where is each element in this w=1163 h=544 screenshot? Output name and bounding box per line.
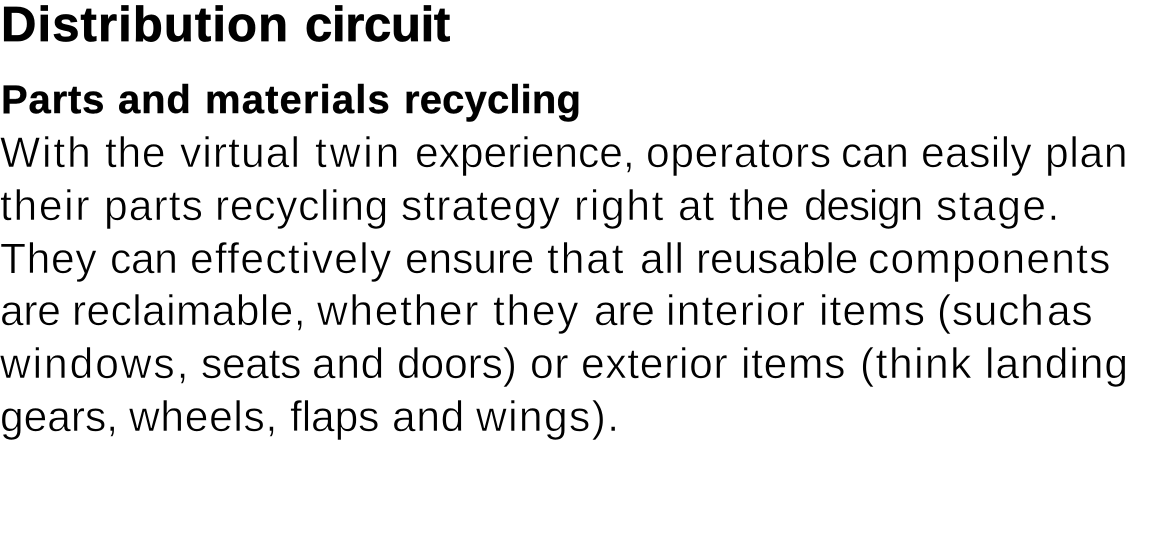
body text block: With [0, 130, 93, 177]
body text block: parts [104, 183, 204, 230]
body text block: easily [921, 130, 1032, 177]
subheading: and [118, 78, 192, 122]
body text block: twin [315, 130, 402, 177]
body text block: or [530, 341, 569, 388]
body text block: effectively [190, 236, 392, 283]
body text block: and [392, 394, 465, 441]
body text block: doors) [397, 341, 517, 388]
subheading: recycling [404, 78, 581, 122]
body text block: (such [937, 288, 1044, 335]
body text block: landing [985, 341, 1129, 388]
body text block: windows, [0, 341, 190, 388]
body text block: components [868, 236, 1112, 283]
body text block: their [0, 183, 91, 230]
body text block: recycling [215, 183, 389, 230]
body text block: (think [860, 341, 973, 388]
body text block: flaps [290, 394, 379, 441]
body text block: virtual [180, 130, 301, 177]
body text block: wings). [476, 394, 620, 441]
body text block: whether [317, 288, 480, 335]
body text block: items [741, 341, 846, 388]
body text block: interior [666, 288, 806, 335]
body text block: all [640, 236, 685, 283]
body text block: right [574, 183, 665, 230]
body text block: can [110, 236, 178, 283]
body text block: design [804, 183, 922, 230]
body text block: that [547, 236, 626, 283]
body text block: as [1047, 288, 1093, 335]
body text block: plan [1045, 130, 1128, 177]
body text block: are [0, 288, 61, 335]
body text block: the [729, 183, 790, 230]
title [1, 0, 450, 52]
body text block: exterior [581, 341, 728, 388]
body text block: strategy [401, 183, 561, 230]
body text block: the [105, 130, 166, 177]
body text block: experience, [415, 130, 635, 177]
body text block: they [493, 288, 580, 335]
body text block: items [819, 288, 926, 335]
body text block: wheels, [129, 394, 278, 441]
body text block: seats [201, 341, 301, 388]
body text block: operators [646, 130, 832, 177]
body text block: at [678, 183, 715, 230]
body text block: gears, [0, 394, 118, 441]
subheading [1, 78, 581, 122]
body text block [0, 130, 1129, 441]
body text block: reusable [696, 236, 858, 283]
body text block: ensure [405, 236, 534, 283]
subheading: Parts [1, 78, 105, 122]
body text block: They [0, 236, 97, 283]
body text block: and [312, 341, 385, 388]
body text block: can [841, 130, 909, 177]
body text block: stage. [936, 183, 1061, 230]
subheading: materials [205, 78, 391, 122]
body text block: are [594, 288, 655, 335]
body text block: reclaimable, [72, 288, 306, 335]
